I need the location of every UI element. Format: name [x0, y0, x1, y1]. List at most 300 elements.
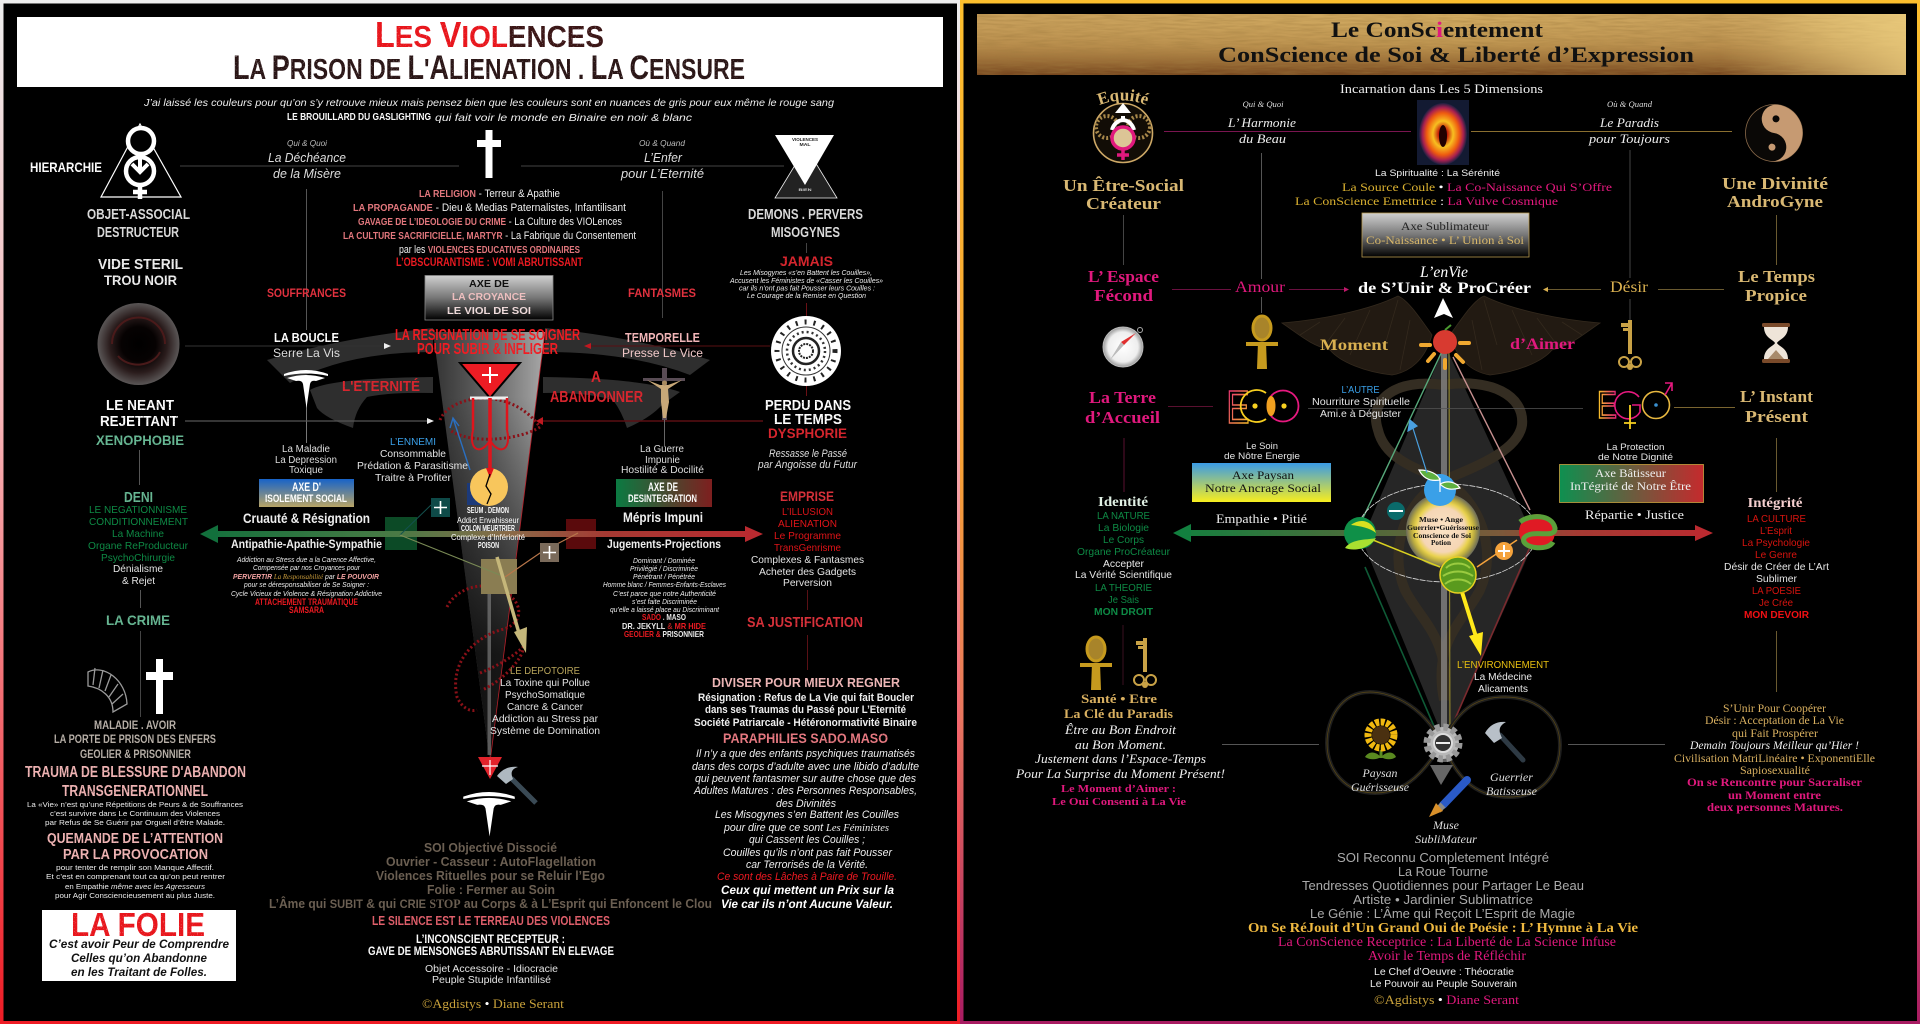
box: Axe de la Croyance: AXE DE: [469, 278, 509, 290]
text: SOI Reconnu block: SOI Reconnu Completement Intégré: [1337, 850, 1549, 865]
text: Maladie Avoir: GEOLIER & PRISONNIER: [80, 749, 192, 761]
text: Intégrité list: LA POESIE: [1752, 585, 1801, 597]
text: Paraphilies Sado.Maso: Ce sont des Lâches à Paire de Trouille.: [717, 871, 897, 883]
text: Le Depotoire: [490, 665, 600, 737]
icon: hammer: [497, 767, 536, 803]
icon: Tesla symbol: [284, 370, 328, 408]
text: Antipathie block: pour se déresponsabiliser de Se Soigner :: [243, 580, 369, 589]
panel: Les Violences (left): [17, 14, 943, 1011]
text: La Religion list: LA RELIGION - Terreur & Apathie: [419, 188, 560, 200]
label and arrow: Amour: [1172, 279, 1349, 296]
icon: yin yang: [1742, 101, 1806, 165]
text: Jugements-Projections block: Privilégié / Discriminée: [630, 564, 698, 573]
text: Emprise list: Acheter des Gadgets: [759, 566, 856, 578]
plus badge: teal: [431, 498, 450, 517]
box: Axe Bâtisseur: Axe Bâtisseur: [1595, 466, 1666, 480]
text: Intégrité list: Intégrité: [1748, 496, 1802, 511]
text: Antipathie block: Antipathie-Apathie-Sympathie: [231, 537, 382, 551]
icon: ECO logo: E: [1226, 381, 1250, 433]
text: La Religion list: [343, 188, 636, 269]
text: L'Environnement: La Médecine: [1474, 672, 1532, 683]
box: Axe d'isolement social: [259, 479, 354, 507]
heading: Une Divinité: Une Divinité: [1722, 174, 1829, 193]
heading: L'Espace Fécond: Fécond: [1094, 286, 1154, 305]
text: Identité list: LA NATURE: [1097, 510, 1150, 522]
heading: Vide Steril Trou Noir: VIDE STERIL: [98, 256, 183, 273]
text: L'Environnement: [1457, 660, 1549, 695]
icon: green brain: [1440, 557, 1476, 593]
icon: EGO logo: E: [1597, 385, 1617, 427]
box: La Folie: C’est avoir Peur de Comprendre: [49, 937, 229, 951]
text: Jamais: Les Misogynes «s’en Battent les Couilles»,: [740, 268, 872, 277]
text: Intégrité list: MON DEVOIR: [1744, 609, 1809, 621]
text: Paraphilies Sado.Maso: qui Cassent les Couilles ;: [749, 834, 865, 846]
heading: L'Espace Fécond: L’ Espace: [1088, 267, 1159, 286]
box: Axe Bâtisseur: La Protection: [1606, 442, 1664, 453]
text: Santé Etre: Le Oui Consenti à La Vie: [1052, 796, 1186, 808]
text: Le Neant Rejettant Xenophobie: XENOPHOBIE: [96, 432, 184, 448]
text: Paraphilies Sado.Maso: des Divinités: [776, 798, 836, 810]
text: A Abandonner: A: [591, 369, 601, 386]
horizontal line and labels: L'Autre: Nourriture Spirituelle: [1312, 397, 1410, 408]
box: Axe Bâtisseur: de Notre Dignité: [1598, 452, 1673, 463]
double arrow: social axis right: [1173, 524, 1713, 542]
horizontal line and labels: L'Autre: L’AUTRE: [1342, 385, 1380, 396]
text: L'Harmonie: L’ Harmonie: [1227, 115, 1296, 130]
text: Quemande: QUEMANDE DE L’ATTENTION: [47, 830, 223, 847]
text: La Déchéance header: [180, 138, 459, 443]
text: Diviser pour mieux regner: [694, 675, 917, 729]
icon: Equité badge: [1092, 89, 1154, 164]
heading: Un Être-Social: Un Être-Social: [1063, 176, 1184, 195]
text: Identité list: Le Corps: [1103, 534, 1144, 546]
icon: sunflower: [1365, 722, 1396, 759]
text: La Vie paragraph: La «Vie» n’est qu’une Répetitions de Peurs & de Souffrances: [27, 800, 243, 809]
text: SOI Objectivé: Ouvrier - Casseur : AutoFlagellation: [386, 854, 596, 869]
text: Emprise list: EMPRISE: [780, 488, 834, 504]
intro text: [143, 97, 834, 124]
text: Le Paradis: [1471, 99, 1732, 321]
intro text: qui fait voir le monde en Binaire en noir & blanc: [435, 112, 693, 124]
scribbled red spiral: [440, 398, 540, 710]
text: L'Ennemi: Prédation & Parasitisme: [357, 460, 468, 472]
heading: Demons Pervers Misogynes: [748, 206, 863, 253]
core circle: Conscience de Soi: [1413, 532, 1471, 540]
text: L'Ennemi: Consommable: [380, 448, 446, 460]
icon: cross: [477, 130, 501, 178]
text: S'Unir pour coopérer: Désir : Acceptation de La Vie: [1705, 715, 1844, 727]
text: Le Neant Rejettant Xenophobie: LE NEANT: [106, 398, 174, 414]
icon: Equité badge: Equité: [1096, 89, 1150, 105]
text: SOI Reconnu block: [1302, 850, 1584, 921]
text: Le Depotoire: Cancre & Cancer: [507, 701, 583, 713]
text: L'Enfer header: L’Enfer: [644, 151, 683, 165]
icon: apple with sun rays: [1421, 298, 1469, 368]
text: La Spiritualité: La Spiritualité : La Sérénité: [1375, 168, 1500, 179]
text: L'Inconscient: [368, 932, 614, 986]
label: Guerrier Batisseuse: Batisseuse: [1486, 784, 1538, 798]
text: Emprise list: ALIENATION: [778, 518, 837, 530]
text: Diviser pour mieux regner: Résignation : Refus de La Vie qui fait Boucler: [698, 692, 915, 704]
text: La Maladie: La Maladie: [282, 444, 330, 455]
text: Identité list: Identité: [1098, 495, 1148, 510]
box: La Folie: Celles qu’on Abandonne: [71, 951, 207, 965]
header banner: ConScientement: Le ConSc ientement: [1331, 17, 1544, 42]
text: Trauma: TRANSGENERATIONNEL: [62, 783, 208, 800]
text: Le Neant Rejettant Xenophobie: REJETTANT: [100, 414, 178, 430]
text: La Religion list: L’OBSCURANTISME : VOMI ABRUTISSANT: [396, 255, 583, 269]
text: Jugements-Projections block: Dominant / Dominée: [633, 556, 695, 565]
box: Axe d'isolement social: ISOLEMENT SOCIAL: [265, 493, 347, 505]
text: Jugements-Projections block: GEOLIER & PRISONNIER: [624, 629, 704, 639]
text: Le Depotoire: LE DEPOTOIRE: [510, 665, 580, 677]
icon: blue sprout: [1419, 470, 1460, 506]
text: Paraphilies Sado.Maso: Adultes Matures : des Personnes Responsables,: [693, 785, 917, 797]
heading: L'Instant Présent: Présent: [1745, 407, 1808, 426]
text: Le Chef d'Oeuvre: Le Pouvoir au Peuple Souverain: [1370, 979, 1517, 990]
text: Green Deni list: Organe ReProducteur: [88, 540, 188, 552]
label: Guerrier Batisseuse: [1486, 770, 1538, 798]
header banner: Les Violences: [17, 14, 943, 87]
text: La Vie paragraph: [27, 800, 243, 827]
text: Antipathie block: [231, 537, 382, 615]
text: Le Depotoire: Système de Domination: [490, 725, 600, 737]
icon: triangle with gender symbols: [101, 124, 181, 199]
text: Green Deni list: CONDITIONNEMENT: [89, 516, 189, 528]
text: Perdu dans le temps Dysphorie: [757, 386, 858, 471]
text: Jamais: Le Courage de la Remise en Question: [747, 291, 866, 300]
text: La Guerre: Hostilité & Docilité: [621, 465, 704, 476]
text: Emprise list: L’ILLUSION: [782, 506, 833, 518]
credit right: ©Agdistys • Diane Serant: [1374, 992, 1519, 1007]
arrows into funnel: [185, 343, 770, 425]
text: centre of funnel: [451, 506, 526, 550]
text: SOI Reconnu block: Artiste • Jardinier Sublimatrice: [1353, 892, 1533, 907]
text: Paraphilies Sado.Maso: Les Misogynes s’en Battent les Couilles: [715, 809, 899, 821]
icon: vulva cosmic: [1417, 100, 1469, 165]
text: La Religion list: LA CULTURE SACRIFICIELLE, MARTYR - La Fabrique du Consentement: [343, 230, 636, 242]
text: Perdu dans le temps Dysphorie: Ressasse le Passé: [769, 448, 847, 460]
text: Quemande: PAR LA PROVOCATION: [63, 846, 208, 863]
text: Green Deni list: PsychoChirurgie: [101, 552, 175, 564]
text: Affectif paragraph: Et c’est en comprenant tout ca qu’on peut rentrer: [46, 872, 226, 881]
text: Emprise list: Le Programme: [774, 530, 841, 542]
plus badge: [1477, 540, 1517, 567]
label: Souffrances: SOUFFRANCES: [267, 286, 346, 300]
text: Green Deni list: Dénialisme: [113, 563, 163, 575]
text: Diviser pour mieux regner: DIVISER POUR MIEUX REGNER: [712, 675, 901, 690]
text: La Crime: LA CRIME: [106, 612, 170, 628]
text: Jamais: [729, 253, 883, 316]
text: Emprise list: Complexes & Fantasmes: [751, 554, 864, 566]
text: Le Chef d'Oeuvre: [1370, 967, 1517, 990]
text: La Crime: [106, 612, 170, 717]
text: La Déchéance header: La Déchéance: [268, 151, 346, 165]
text: S'Unir pour coopérer: Demain Toujours Meilleur qu’Hier !: [1689, 740, 1859, 752]
text: Le Paradis: Le Paradis: [1599, 115, 1659, 130]
text: Intégrité list: Je Crée: [1759, 597, 1793, 609]
icon: spiral clock: [771, 316, 841, 386]
text: Affectif paragraph: pour tenter de remplir son Manque Affectif.: [56, 863, 214, 872]
icon: violence hourglass triangles: VIOLENCES: [792, 137, 818, 142]
text: Santé Etre: Justement dans l’Espace-Temps: [1035, 751, 1206, 766]
text: La Religion list: LA PROPAGANDE - Dieu & Medias Paternalistes, Infantilisant: [353, 202, 626, 214]
heading: Le Temps Propice: [1738, 267, 1815, 305]
text: Moment d'Aimer: d’Aimer: [1510, 336, 1575, 353]
text: SOI Objectivé: Folie : Fermer au Soin: [427, 882, 555, 897]
text: L'Eternité: L'ETERNITÉ: [342, 378, 420, 395]
text: S'Unir pour coopérer: [1674, 703, 1875, 814]
box: La Folie: en les Traitant de Folles.: [71, 965, 207, 979]
icon: dragon: [1519, 514, 1555, 550]
icon: violence hourglass triangles: MAL: [800, 142, 811, 147]
text: Jugements-Projections block: Homme blanc / Femmes-Enfants-Esclaves: [603, 580, 726, 589]
horizontal line and labels: L'Autre: [1308, 385, 1583, 420]
text: La Boucle: [273, 330, 340, 360]
text: Le Paradis: Où & Quand: [1607, 99, 1653, 109]
text: L'Enfer header: Où & Quand: [639, 138, 685, 148]
text: Intégrité list: Sublimer: [1756, 573, 1797, 585]
panel: Le ConScientement (right): [977, 14, 1906, 1007]
small red triangle: [478, 757, 502, 779]
text: A Abandonner: ABANDONNER: [550, 389, 643, 406]
icon: violence hourglass triangles: BIEN: [798, 187, 812, 192]
text: L'Environnement: Alicaments: [1478, 684, 1528, 695]
core circle: [1406, 493, 1480, 567]
label: Paysan Guérisseuse: Guérisseuse: [1351, 780, 1410, 794]
text: Identité list: Organe ProCréateur: [1077, 546, 1170, 558]
text: Antipathie block: PERVERTIR La Responsabilité par LE POUVOIR: [233, 572, 380, 581]
text: Antipathie block: Cycle Vicieux de Violence & Résignation Addictive: [231, 589, 382, 598]
text: La Guerre: [621, 444, 704, 476]
text: L'Ennemi: [357, 436, 468, 484]
text: La ConScience Receptrice: Avoir le Temps de Réfléchir: [1368, 948, 1527, 963]
text: Jugements-Projections block: C’est parce que notre Authenticité: [613, 589, 716, 598]
text: La Religion list: par les VIOLENCES EDUCATIVES ORDINAIRES: [399, 244, 580, 256]
text: Intégrité list: La Psychologie: [1742, 537, 1810, 549]
text: Perdu dans le temps Dysphorie: LE TEMPS: [774, 412, 842, 428]
text: Jugements-Projections block: qu’elle a laissé place au Discriminant: [610, 605, 720, 614]
text: L'Ennemi: L’ENNEMI: [390, 436, 436, 448]
heading: Demons Pervers Misogynes: DEMONS . PERVERS: [748, 206, 863, 223]
text: Paraphilies Sado.Maso: Vie car ils n’ont Aucune Valeur.: [721, 897, 893, 911]
label and arrow: Désir: Désir: [1610, 279, 1649, 296]
text: Santé Etre: La Clé du Paradis: [1064, 706, 1173, 721]
icon: big Tesla symbol: [463, 792, 515, 836]
box: Axe Sublimateur: Co-Naissance • L’ Union à Soi: [1366, 233, 1525, 247]
diamond diagram: [1357, 345, 1537, 762]
box: Axe de la Croyance: LA CROYANCE: [452, 291, 526, 303]
label: Muse SubliMateur: SubliMateur: [1415, 832, 1477, 846]
box: Axe de desintegration: [616, 479, 712, 507]
label: Muse SubliMateur: Muse: [1432, 818, 1460, 832]
text: S'Unir pour coopérer: qui Fait Prospérer: [1732, 728, 1818, 740]
heading: Vide Steril Trou Noir: [98, 256, 183, 288]
text: Green Deni list: La Machine: [112, 528, 164, 540]
icon: EGO logo: [1597, 383, 1672, 429]
text: Santé Etre: Le Moment d’Aimer :: [1061, 783, 1176, 795]
heading: Objet-Associal Destructeur: DESTRUCTEUR: [97, 224, 179, 241]
icon: black hole: [98, 303, 180, 385]
caduceus snakes: [1376, 383, 1522, 700]
text: La Spiritualité: La Source Coule • La Co-Naissance Qui S’Offre: [1342, 180, 1612, 194]
text: centre of funnel: Addict Envahisseur: [457, 516, 519, 525]
text: L'Inconscient: Peuple Stupide Infantilisé: [432, 975, 551, 986]
swoosh arcs: [267, 328, 710, 428]
text: Identité list: La Biologie: [1098, 522, 1149, 534]
intro text: J’ai laissé les couleurs pour qu’on s’y retrouve mieux mais pensez bien que les couleurs sont en nuances de gris pour eux même le rouge sang: [143, 97, 834, 109]
text: Paraphilies Sado.Maso: [692, 730, 919, 911]
heading: Le Temps Propice: Le Temps: [1738, 267, 1815, 286]
text: Paraphilies Sado.Maso: Couilles qu’ils n’ont pas fait Pousser: [723, 847, 893, 859]
text: On Se RéJouit: On Se RéJouit d’Un Grand Oui de Poésie : L’ Hymne à La Vie: [1248, 920, 1638, 935]
heading: Une Divinité: [1722, 174, 1829, 265]
text: Temporelle: [622, 330, 703, 360]
icon: ankh lower: [1080, 637, 1112, 690]
text: Temporelle: Presse Le Vice: [622, 346, 703, 360]
text: SOI Reconnu block: Le Génie : L’Âme qui Reçoit L’Esprit de Magie: [1310, 906, 1575, 921]
box: Axe de la Croyance: LE VIOL DE SOI: [447, 305, 531, 317]
text: Identité list: LA THEORIE: [1095, 582, 1152, 594]
text: L'enVie: [1358, 264, 1531, 297]
text: Cruauté & Mépris: Cruauté & Résignation: [243, 510, 370, 526]
box: Axe Bâtisseur: Répartie • Justice: [1585, 507, 1684, 522]
box: La Folie: LA FOLIE: [71, 906, 205, 943]
text: L'enVie: L’enVie: [1419, 264, 1468, 281]
text: Affectif paragraph: [46, 863, 226, 900]
text: La Vie paragraph: par Refus de Se Guérir par Orgueil d’être Malade.: [45, 818, 225, 827]
text: Sa Justification: SA JUSTIFICATION: [747, 614, 863, 631]
text: S'Unir pour coopérer: deux personnes Matures.: [1707, 802, 1843, 814]
text: La Religion list: GAVAGE DE L’IDEOLOGIE DU CRIME - La Culture des VIOLences: [358, 216, 622, 228]
text: Paraphilies Sado.Maso: qui peuvent fantasmer sur autre chose que des: [695, 773, 916, 785]
box: Axe Bâtisseur: InTégrité de Notre Être: [1570, 479, 1691, 493]
text: Intégrité list: Le Genre: [1755, 549, 1797, 561]
text: Jugements-Projections block: s’est faite Discriminée: [632, 597, 697, 606]
text: SOI Objectivé: Violences Rituelles pour se Reluir l’Ego: [376, 868, 605, 883]
text: Paraphilies Sado.Maso: dans des corps d’adulte avec une libido d’adulte: [692, 761, 919, 773]
heading: Objet-Associal Destructeur: [87, 206, 190, 241]
yellow line and arrow: [1373, 540, 1483, 656]
text: La Maladie: La Depression: [275, 455, 337, 466]
text: Santé Etre: Santé • Etre: [1081, 691, 1157, 706]
text: Jugements-Projections block: DR. JEKYLL & MR HIDE: [622, 621, 706, 631]
text: Resignation: POUR SUBIR & INFLIGER: [417, 341, 558, 358]
text: Antipathie block: Compensée par nos Croyances pour: [253, 563, 360, 572]
icon: chameleon: [1344, 517, 1376, 550]
text: L'Harmonie: [1164, 99, 1411, 313]
text: L'enVie: de S’Unir & ProCréer: [1358, 280, 1531, 297]
wings: [1282, 296, 1600, 375]
heading: Le Temps Propice: Propice: [1745, 286, 1807, 305]
text: S'Unir pour coopérer: Sapiosexualité: [1740, 765, 1810, 777]
text: Affectif paragraph: en Empathie même avec les Agresseurs: [65, 882, 205, 891]
intro text: LE BROUILLARD DU GASLIGHTING: [287, 112, 431, 123]
label: Paysan Guérisseuse: [1351, 766, 1410, 794]
text: Diviser pour mieux regner: dans ses Traumas du Passé pour L’Eternité: [705, 704, 906, 716]
text: Maladie Avoir: LA PORTE DE PRISON DES ENFERS: [54, 734, 216, 746]
header banner: Les Violences: LES VIOLENCES: [375, 14, 604, 55]
text: Moment d'Aimer: Moment: [1320, 337, 1389, 354]
text: La Déchéance header: de la Misère: [273, 167, 341, 181]
text: La ConScience Receptrice: La ConScience Receptrice : La Liberté de La Science Infuse: [1278, 934, 1616, 949]
text: Antipathie block: ATTACHEMENT TRAUMATIQUE: [255, 597, 358, 607]
box: Axe de desintegration: DESINTEGRATION: [628, 493, 697, 505]
label: Guerrier Batisseuse: Guerrier: [1490, 770, 1533, 784]
text: Le Paradis: pour Toujours: [1588, 131, 1670, 146]
text: SOI Objectivé: L’Âme qui SUBIT & qui CRIE STOP au Corps & à L’Esprit qui Enfoncent le Clou: [269, 896, 712, 911]
text: Green Deni list: [88, 489, 189, 608]
text: centre of funnel: COLON MEURTRIER: [461, 524, 515, 533]
text: Jamais: JAMAIS: [780, 253, 833, 269]
text: Perdu dans le temps Dysphorie: par Angoisse du Futur: [757, 459, 858, 471]
text: La Maladie: [275, 444, 337, 476]
crucifix: [643, 368, 685, 447]
text: Identité list: MON DROIT: [1094, 606, 1154, 618]
text: Emprise list: Perversion: [783, 577, 832, 589]
text: Perdu dans le temps Dysphorie: PERDU DANS: [765, 398, 851, 414]
text: L'Inconscient: Objet Accessoire - Idiocracie: [425, 964, 558, 975]
icon: chastity cage: [88, 668, 127, 712]
text: Jamais: car ils n’ont pas fait Pousser leurs Couilles :: [739, 284, 875, 292]
icon: ECO logo: [1226, 381, 1298, 433]
text: Paraphilies Sado.Maso: PARAPHILIES SADO.MASO: [723, 730, 888, 746]
text: SOI Objectivé: [269, 840, 712, 911]
text: S'Unir pour coopérer: Civilisation MatriLinéaire • ExponentiElle: [1674, 753, 1875, 765]
text: Intégrité list: [1724, 496, 1829, 692]
text: L'Enfer header: [521, 138, 784, 318]
text: A Abandonner: [550, 369, 643, 406]
heading: Incarnation: Incarnation dans Les 5 Dimensions: [1340, 82, 1543, 96]
text: Le Depotoire: La Toxine qui Pollue: [500, 677, 590, 689]
core circle: Potion: [1431, 539, 1451, 547]
text: Santé Etre: Pour La Surprise du Moment Présent!: [1015, 766, 1225, 781]
text: SOI Reconnu block: Tendresses Quotidiennes pour Partager Le Beau: [1302, 878, 1584, 893]
label and arrow: Amour: Amour: [1235, 279, 1286, 296]
text: S'Unir pour coopérer: un Moment entre: [1728, 790, 1821, 802]
text: La Guerre: Impunie: [645, 455, 680, 466]
text: Temporelle: TEMPORELLE: [625, 330, 700, 345]
horizontal line and labels: L'Autre: Ami.e à Déguster: [1320, 409, 1402, 420]
icon: gear: [1427, 727, 1459, 785]
text: Antipathie block: Addiction au Stress due a la Carence Affective,: [236, 555, 376, 564]
box: Axe de la Croyance: [425, 276, 553, 320]
double arrow: social axis: [200, 498, 763, 653]
core circle: Muse • Ange: [1419, 516, 1463, 524]
box: Axe Paysan: Empathie • Pitié: [1216, 511, 1307, 526]
text: Santé Etre: au Bon Moment.: [1075, 737, 1166, 752]
credit left: ©Agdistys • Diane Serant: [422, 996, 564, 1011]
header banner: Les Violences: LA PRISON DE L'ALIENATION . LA CENSURE: [233, 49, 745, 87]
text: Maladie Avoir: MALADIE . AVOIR: [94, 720, 177, 732]
text: Green Deni list: & Rejet: [122, 575, 155, 587]
icon: hammer right: [1485, 722, 1523, 760]
text: L'Inconscient: L’INCONSCIENT RECEPTEUR :: [416, 932, 565, 946]
label: Fantasmes: FANTASMES: [628, 286, 696, 300]
box: Axe Paysan: Axe Paysan: [1232, 468, 1294, 482]
text: SOI Objectivé: SOI Objectivé Dissocié: [424, 840, 557, 855]
text: La Boucle: LA BOUCLE: [274, 330, 339, 345]
text: Green Deni list: DENI: [124, 489, 153, 506]
heading: Un Être-Social: Créateur: [1086, 194, 1162, 213]
text: Paraphilies Sado.Maso: Ceux qui mettent un Prix sur la: [721, 883, 894, 897]
icon: violence hourglass triangles: [775, 135, 837, 198]
text: Jugements-Projections block: Jugements-Projections: [607, 537, 721, 551]
header banner: ConScientement: [977, 14, 1906, 75]
text: Santé Etre: Être au Bon Endroit: [1064, 722, 1176, 737]
plus badge: taupe: [540, 543, 559, 562]
icon: hourglass: [1762, 323, 1790, 363]
